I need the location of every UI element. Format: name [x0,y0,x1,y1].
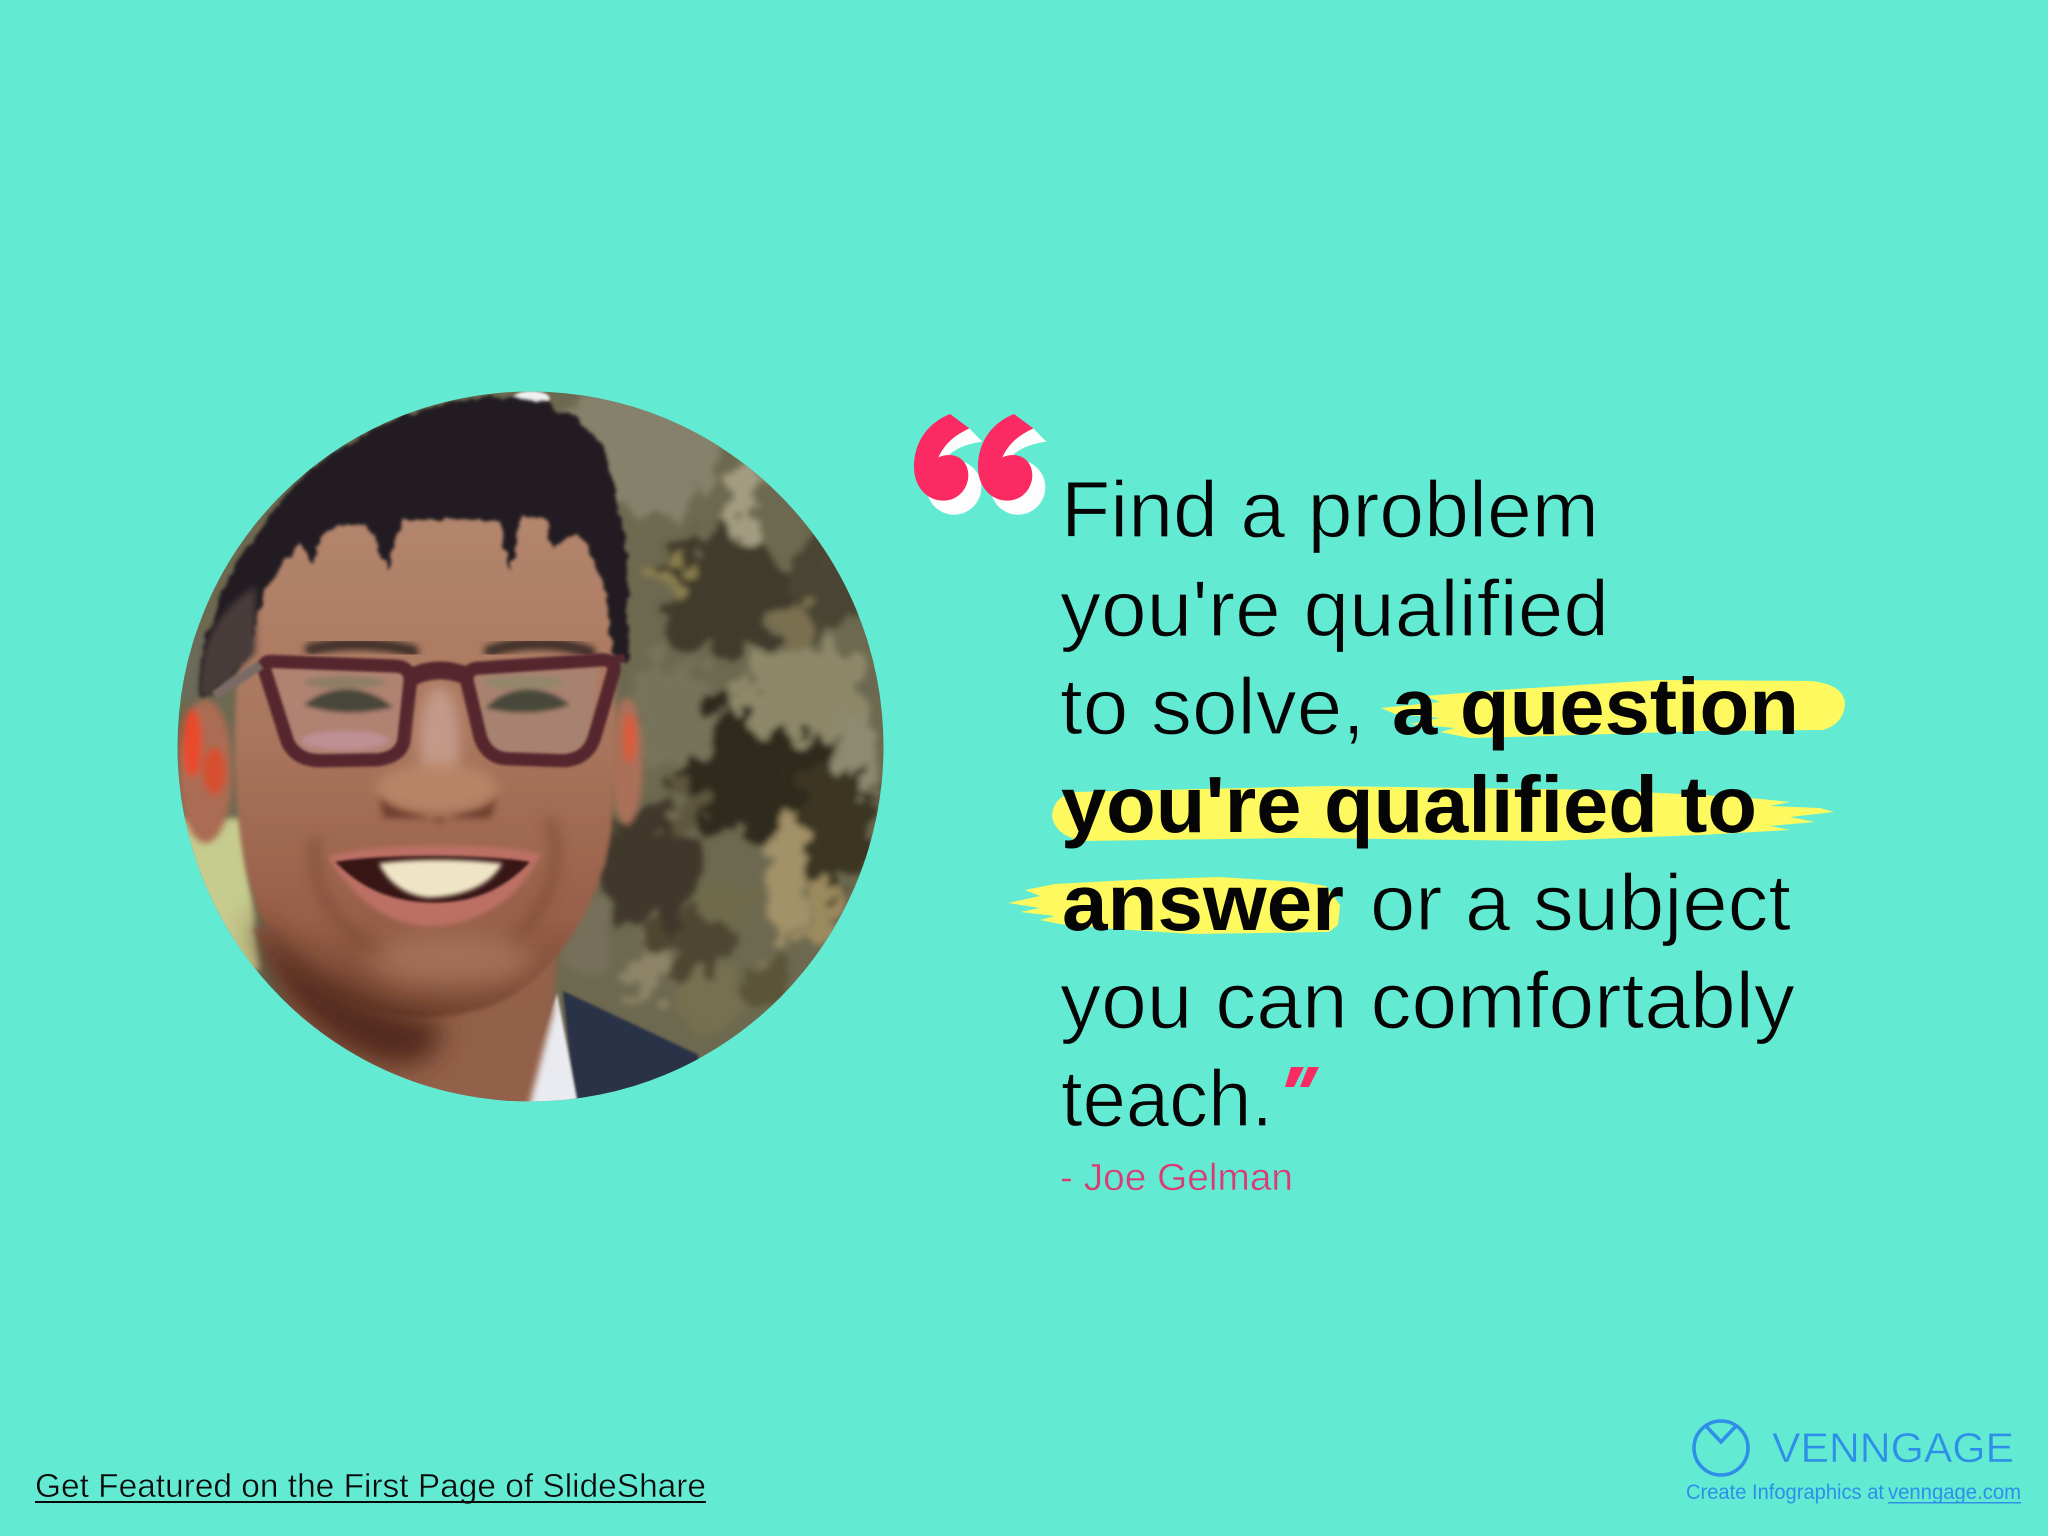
line 4 bold: you're qualified to [1061,760,1757,849]
hair [200,397,628,695]
sky highlight [513,391,550,406]
line 2: you're qualified [1060,564,1609,653]
line 5 regular: or a subject [1370,858,1791,947]
icon: opening quotation mark [914,414,1046,515]
attribution: - Joe Gelman [1060,1157,1293,1199]
suit jacket [562,990,700,1099]
venngage logo [1686,1421,2021,1504]
line 3 bold: a question [1392,662,1799,751]
icon: venngage mark [1694,1421,1748,1475]
footer link: Get Featured on the First Page of SlideShare [35,1467,706,1504]
line 6: you can comfortably [1060,956,1795,1045]
venngage link: venngage.com [1888,1481,2021,1504]
nose [376,686,497,823]
eyebrows [311,644,589,652]
tree bark background [178,392,884,1102]
shirt collar [518,993,579,1102]
highlight brush stroke: line 4 [1052,786,1834,841]
line 5 bold: answer [1062,858,1344,947]
line 1: Find a problem [1061,465,1599,554]
face [235,510,616,1018]
wordmark: VENNGAGE [1772,1424,2014,1471]
white shadow of second mark [991,428,1046,515]
quote text [1060,465,1799,1143]
highlight brush stroke: line 5 [1008,877,1340,934]
tagline: Create Infographics at [1686,1481,1884,1504]
ears [179,698,643,843]
white shadow of first mark [927,428,982,515]
glasses frame [215,658,625,761]
mouth [328,845,541,926]
photo: portrait of Joe Gelman [178,392,884,1102]
glasses lenses [272,667,599,757]
left background foliage [171,634,260,979]
pink first mark [914,414,969,501]
highlight brush stroke: line 3 [1381,680,1845,738]
neck [251,925,559,1102]
pink second mark [978,414,1033,501]
icon: closing quotation mark [1285,1067,1319,1087]
line 3 regular: to solve, [1060,662,1365,751]
line 7: teach. [1061,1054,1273,1143]
jaw shadows [251,818,556,1066]
